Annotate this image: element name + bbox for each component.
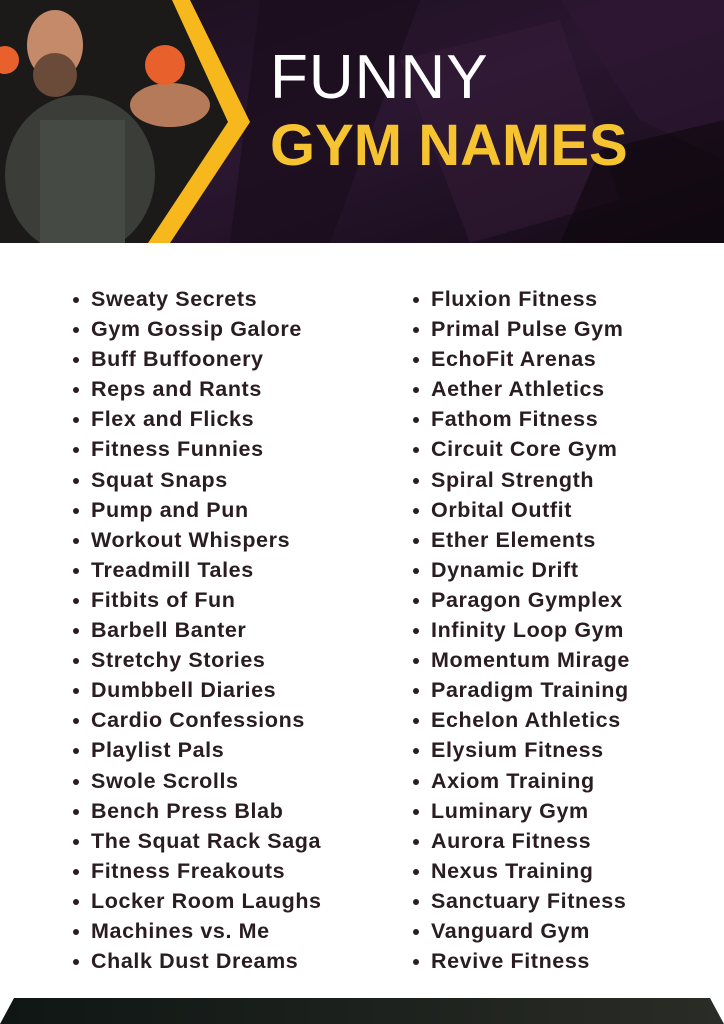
list: left column: Squat Snaps bbox=[91, 468, 228, 492]
photo: man with kettlebells bbox=[0, 0, 245, 255]
list: right column: Nexus Training bbox=[431, 859, 594, 883]
yellow chevron bbox=[148, 0, 250, 243]
list: right column: Orbital Outfit bbox=[431, 498, 572, 522]
list: left column: Playlist Pals bbox=[91, 738, 224, 762]
list: left column: Treadmill Tales bbox=[91, 558, 254, 582]
list: left column: Gym Gossip Galore bbox=[91, 317, 302, 341]
list: left column: Fitbits of Fun bbox=[91, 588, 236, 612]
list: left column: Machines vs. Me bbox=[91, 919, 270, 943]
list: right column: Luminary Gym bbox=[431, 799, 589, 823]
list: left column: Workout Whispers bbox=[91, 528, 290, 552]
list: right column: Aurora Fitness bbox=[431, 829, 591, 853]
list: right column: Circuit Core Gym bbox=[431, 437, 617, 461]
list: right column: Infinity Loop Gym bbox=[431, 618, 624, 642]
list: left column: Buff Buffoonery bbox=[91, 347, 264, 371]
list: left column bbox=[73, 287, 322, 973]
list: right column: Fathom Fitness bbox=[431, 407, 598, 431]
title: FUNNY bbox=[270, 43, 489, 112]
list: left column: Barbell Banter bbox=[91, 618, 246, 642]
list: right column: Fluxion Fitness bbox=[431, 287, 598, 311]
header banner bbox=[0, 0, 724, 243]
title: GYM NAMES bbox=[270, 113, 628, 178]
list: left column: Bench Press Blab bbox=[91, 799, 283, 823]
list: right column: Aether Athletics bbox=[431, 377, 605, 401]
list: right column: Primal Pulse Gym bbox=[431, 317, 623, 341]
list: right column: Paradigm Training bbox=[431, 678, 629, 702]
list: left column: Flex and Flicks bbox=[91, 407, 254, 431]
list: left column: Dumbbell Diaries bbox=[91, 678, 276, 702]
list: left column: Stretchy Stories bbox=[91, 648, 266, 672]
title bbox=[270, 43, 628, 178]
list: right column: Echelon Athletics bbox=[431, 708, 621, 732]
list: left column: The Squat Rack Saga bbox=[91, 829, 321, 853]
list: right column: Momentum Mirage bbox=[431, 648, 630, 672]
list: right column: Revive Fitness bbox=[431, 949, 590, 973]
list: right column bbox=[413, 287, 630, 973]
list: right column: Ether Elements bbox=[431, 528, 596, 552]
list: left column: Fitness Funnies bbox=[91, 437, 264, 461]
list: left column: Swole Scrolls bbox=[91, 768, 239, 792]
list: right column: Paragon Gymplex bbox=[431, 588, 623, 612]
list: right column: Axiom Training bbox=[431, 768, 595, 792]
list: right column: Vanguard Gym bbox=[431, 919, 590, 943]
footer bar bbox=[0, 998, 724, 1024]
list: right column: Sanctuary Fitness bbox=[431, 889, 626, 913]
list: right column: EchoFit Arenas bbox=[431, 347, 596, 371]
list: left column: Locker Room Laughs bbox=[91, 889, 322, 913]
list: left column: Cardio Confessions bbox=[91, 708, 305, 732]
list: right column: Elysium Fitness bbox=[431, 738, 604, 762]
list: left column: Pump and Pun bbox=[91, 498, 249, 522]
list: left column: Chalk Dust Dreams bbox=[91, 949, 298, 973]
list: right column: Dynamic Drift bbox=[431, 558, 579, 582]
list: left column: Sweaty Secrets bbox=[91, 287, 257, 311]
list: left column: Fitness Freakouts bbox=[91, 859, 285, 883]
list: left column: Reps and Rants bbox=[91, 377, 262, 401]
list: right column: Spiral Strength bbox=[431, 468, 594, 492]
